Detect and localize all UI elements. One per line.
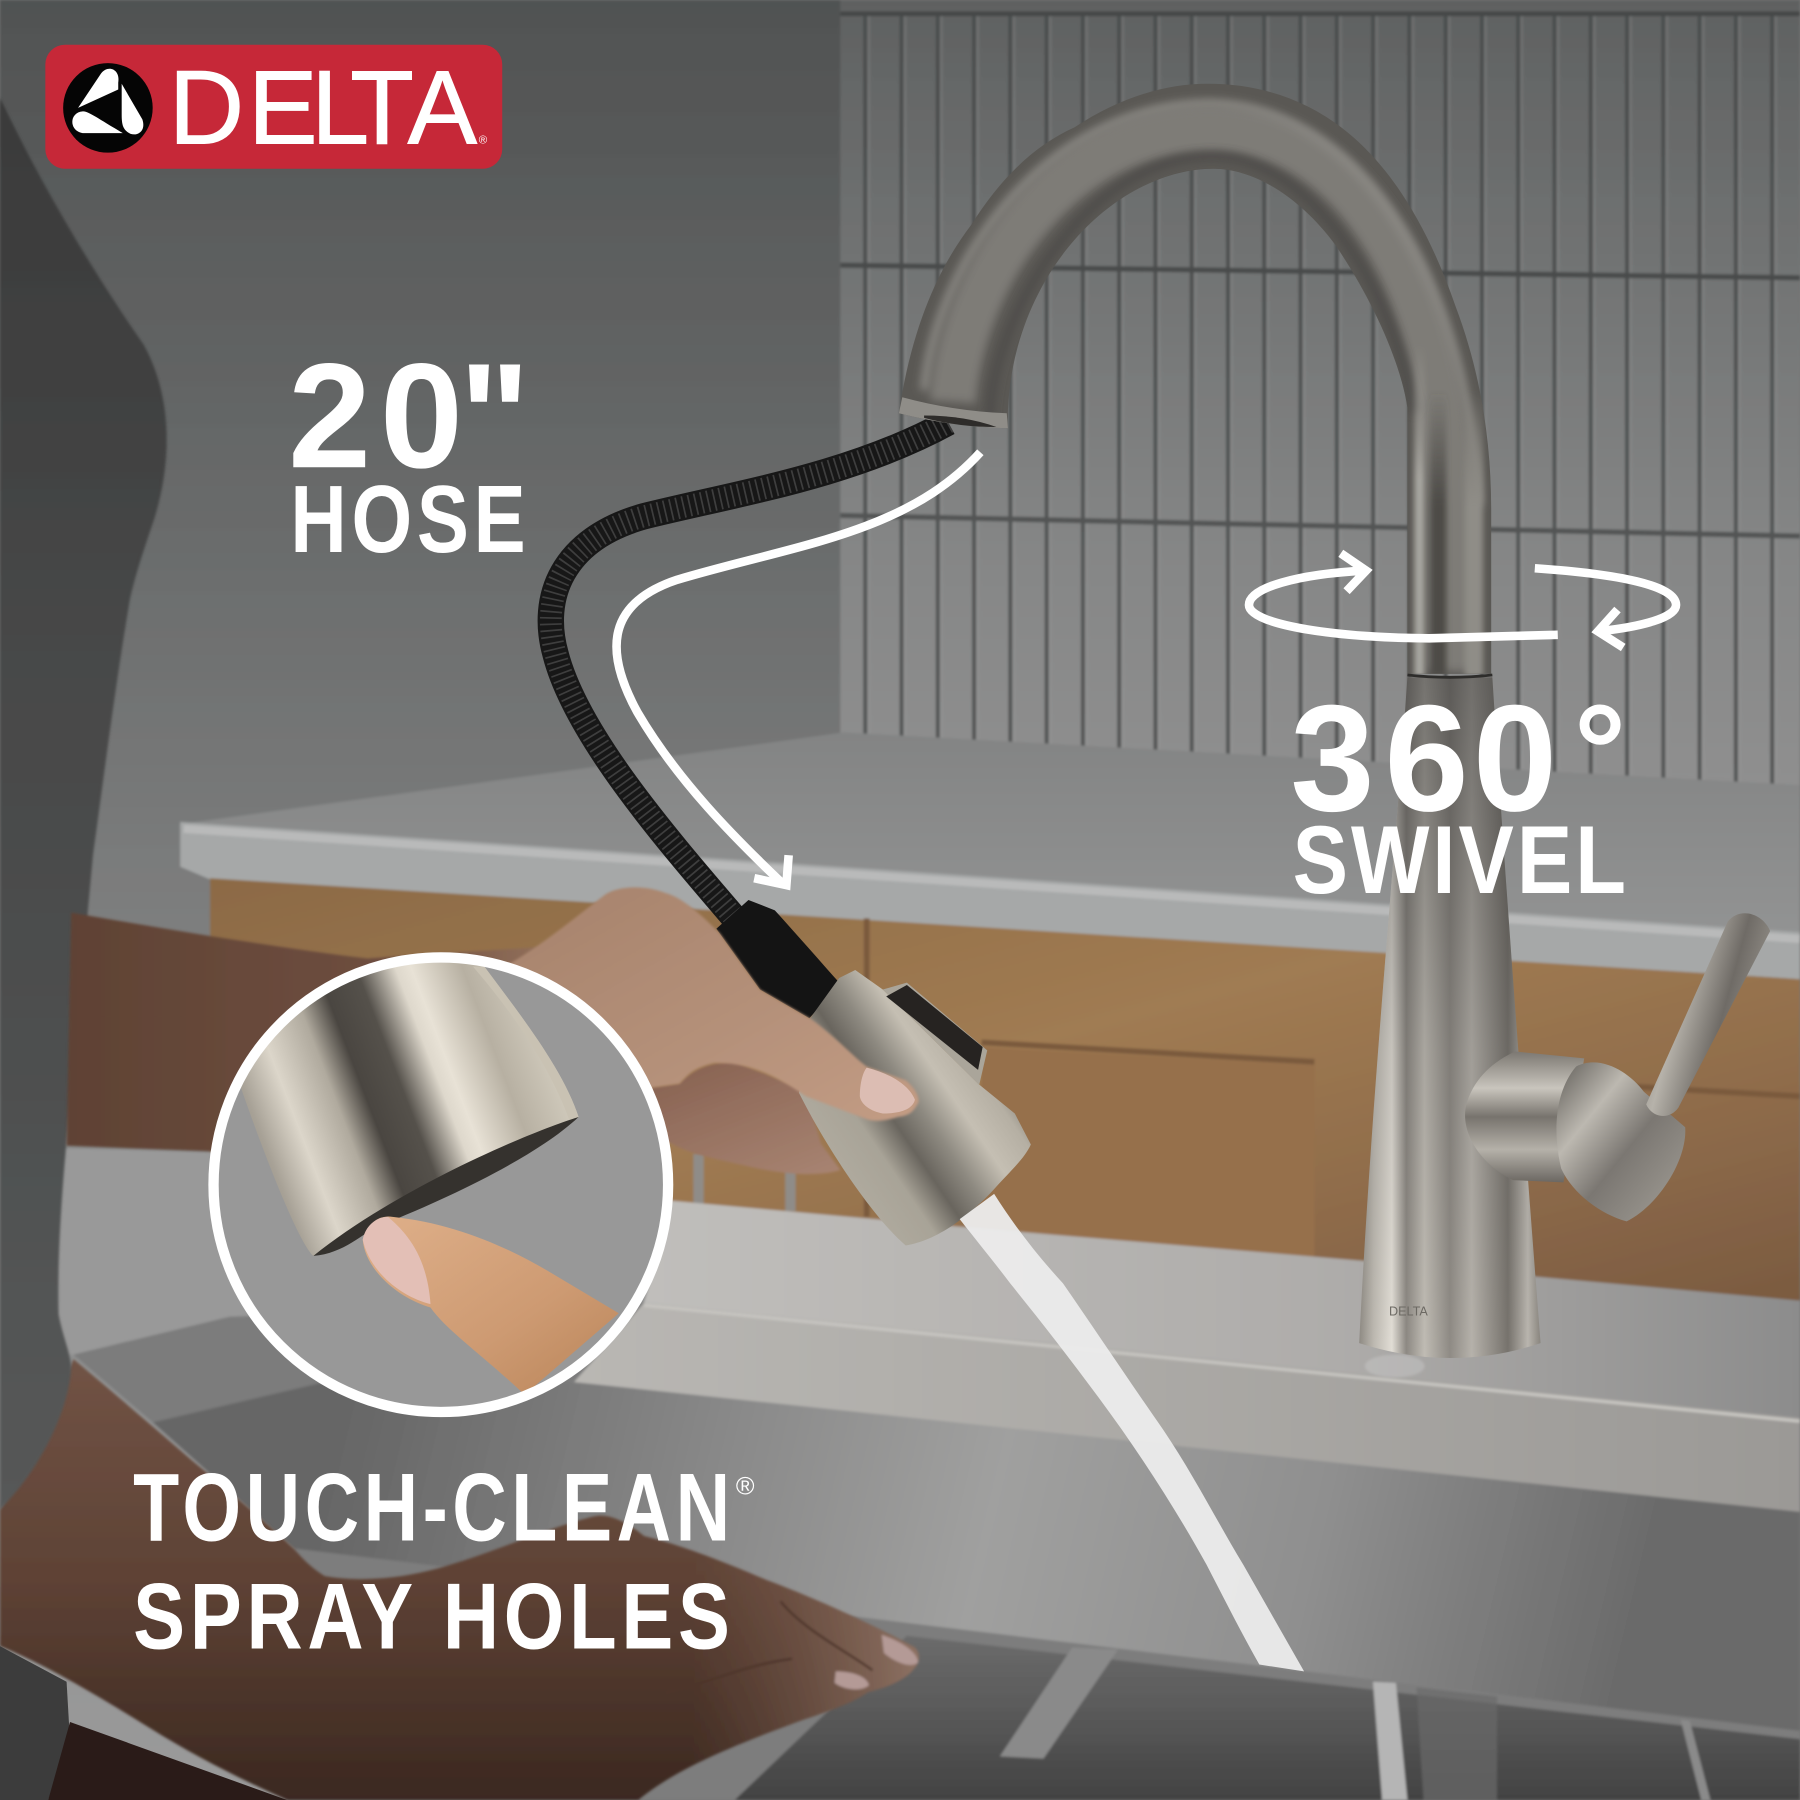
logo mark on faucet: DELTA <box>1389 1305 1428 1319</box>
heading: 360 degrees: 360 <box>1290 674 1557 843</box>
arrow: hose length <box>617 452 980 885</box>
lower hand on sink <box>0 1359 919 1800</box>
inset nozzle rim <box>473 967 579 1120</box>
back counter top <box>180 732 1800 936</box>
sink basin <box>153 1382 1800 1731</box>
label: touch-clean: TOUCH-CLEAN <box>133 1455 735 1562</box>
spout tip <box>899 397 1008 428</box>
lever handle <box>1646 913 1770 1116</box>
inset finger <box>363 1216 619 1395</box>
hand and thumb holding sprayer <box>505 887 919 1121</box>
fingers under sprayer <box>551 1062 840 1174</box>
heading: 360 degrees: ° <box>1574 678 1626 824</box>
person: forearm <box>67 913 551 1159</box>
tiled backsplash <box>840 0 1800 785</box>
sink counter surface <box>644 1201 1800 1418</box>
water stream <box>960 1194 1304 1671</box>
faucet collar line <box>1407 675 1492 677</box>
spout shading <box>924 103 1483 677</box>
wood cabinets <box>210 878 1800 1303</box>
logo emblem <box>63 63 153 153</box>
black hose <box>551 422 948 918</box>
left counter surface <box>73 1303 644 1422</box>
inset sprayer nozzle <box>241 962 578 1256</box>
spray head <box>799 970 1031 1246</box>
lever knob <box>1556 1062 1685 1221</box>
label: hose: HOSE <box>290 467 530 573</box>
thumbnail <box>860 1068 915 1114</box>
faucet <box>899 84 1770 1378</box>
counter front edge <box>574 1303 1800 1512</box>
lower hand nails <box>835 1635 918 1689</box>
bottom left shadow <box>48 1722 287 1800</box>
heading: 20 inch: 20" <box>288 332 530 499</box>
lever hub <box>1465 1052 1584 1182</box>
person: sweater <box>0 98 167 1510</box>
sprayer connector <box>716 900 840 1018</box>
dark sink floor <box>735 1636 1800 1800</box>
Delta logo badge <box>45 45 502 169</box>
faucet body top shading <box>1359 677 1541 1358</box>
inset spray face <box>313 1117 579 1256</box>
inset fingernail <box>363 1217 430 1304</box>
faucet base reflection <box>1365 1355 1425 1378</box>
back counter edge <box>180 822 1800 979</box>
faucet spout <box>899 84 1491 677</box>
lower hand knuckles <box>593 1516 919 1785</box>
label: spray holes: SPRAY HOLES <box>133 1563 735 1668</box>
lower wall left <box>57 1148 367 1355</box>
person: lower sweater <box>0 1646 70 1800</box>
sink rim band <box>287 1549 1800 1800</box>
registered mark: ® <box>736 1473 755 1501</box>
spray button <box>886 985 983 1070</box>
inset: touch-clean spray holes <box>214 941 668 1412</box>
spray button rim <box>883 983 987 1085</box>
registered mark: ® <box>479 134 488 146</box>
logo wordmark: DELTA <box>169 49 478 166</box>
arrows: swivel rotation <box>1249 553 1676 647</box>
label: swivel: SWIVEL <box>1293 807 1629 914</box>
faucet body <box>1359 677 1541 1358</box>
lower hand finger crease <box>666 1601 872 1693</box>
